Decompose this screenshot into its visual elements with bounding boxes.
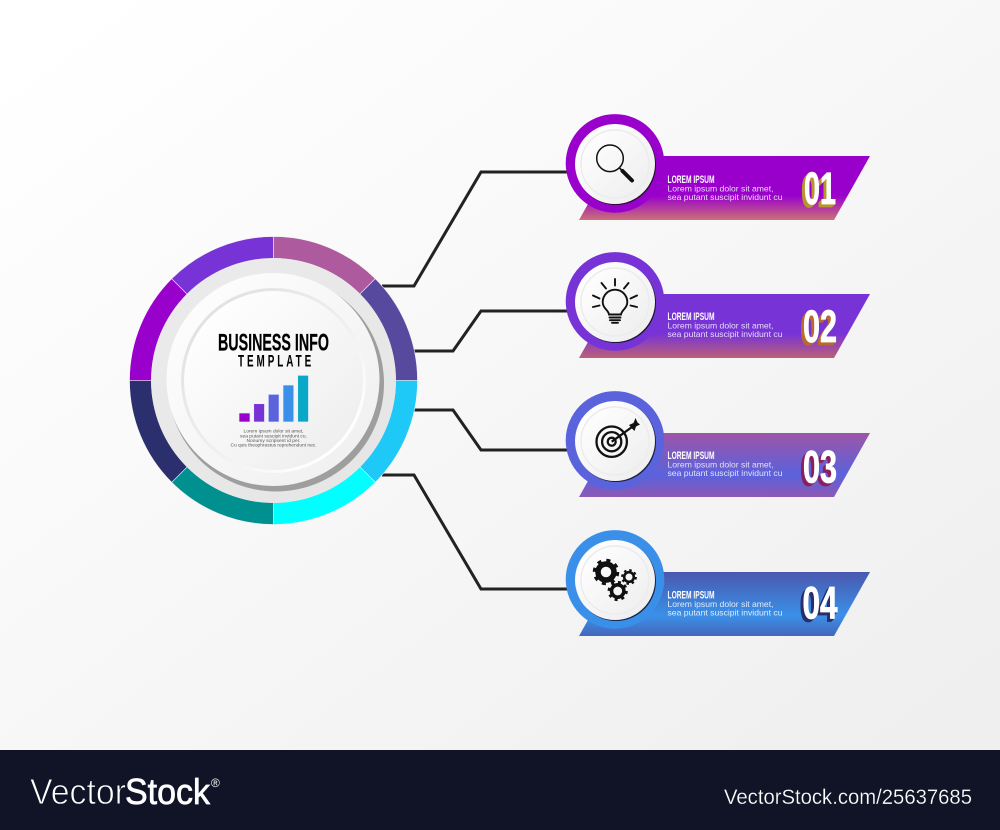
footer bar <box>0 750 1000 830</box>
footer logo: Vector <box>30 771 126 812</box>
text 02: LOREM IPSUM <box>668 311 715 323</box>
central subheading: TEMPLATE <box>238 352 311 370</box>
text 04: sea putant suscipit invidunt cu <box>668 608 783 618</box>
number 02: 02 <box>800 304 834 355</box>
item 03 <box>566 391 870 497</box>
text 04: LOREM IPSUM <box>668 590 715 602</box>
number 01: 01 <box>802 165 834 216</box>
central caption: Cu quis theophrastus reprehendunt nec. <box>230 442 316 448</box>
banner 03 <box>579 433 870 497</box>
text 03: Lorem ipsum dolor sit amet, <box>668 460 774 469</box>
central heading: BUSINESS INFO <box>218 330 329 356</box>
text 01 <box>668 174 783 202</box>
number 01: 01 <box>801 166 833 217</box>
central caption <box>230 429 316 448</box>
badge 04 <box>566 530 664 629</box>
number 03: 03 <box>803 442 837 492</box>
number 01 <box>801 163 836 217</box>
text 02: Lorem ipsum dolor sit amet, <box>668 321 774 330</box>
number 04: 04 <box>802 578 838 628</box>
number 01: 01 <box>804 163 836 214</box>
text 01: LOREM IPSUM <box>668 174 715 186</box>
number 02: 02 <box>803 301 837 352</box>
text 01: sea putant suscipit invidunt cu <box>668 193 783 202</box>
badge 03 <box>566 391 664 490</box>
item 04 <box>566 530 870 636</box>
banner 01 <box>579 156 870 220</box>
text 02: sea putant suscipit invidunt cu <box>668 330 783 339</box>
grey plate <box>151 258 396 503</box>
number 04: 04 <box>800 580 834 632</box>
text 01: Lorem ipsum dolor sit amet, <box>668 184 774 193</box>
number 03: 03 <box>800 444 834 496</box>
icon: gears <box>594 560 636 600</box>
bar chart <box>239 375 308 422</box>
central caption: sea putant suscipit invidunt cu. <box>240 433 307 438</box>
footer logo: Stock <box>125 771 211 812</box>
white disc <box>166 273 380 486</box>
text 03 <box>668 450 783 478</box>
badge 01 <box>566 114 664 213</box>
number 04: 04 <box>802 578 836 630</box>
number 02: 02 <box>802 302 836 353</box>
inner disc ring <box>182 290 364 472</box>
banner 04 <box>579 572 870 636</box>
item 01 <box>566 114 870 220</box>
footer logo <box>30 771 220 812</box>
number 03: 03 <box>802 442 836 494</box>
text 04 <box>668 590 783 618</box>
central circle <box>130 236 418 524</box>
number 03: 03 <box>801 444 835 494</box>
item 02 <box>566 252 870 358</box>
icon: magnifying glass <box>597 145 632 180</box>
central caption: Nonumy scripsent id per. <box>246 438 300 443</box>
badge 02 <box>566 252 664 351</box>
text 04: Lorem ipsum dolor sit amet, <box>668 600 774 609</box>
segmented colour ring <box>130 236 418 524</box>
text 02 <box>668 311 783 339</box>
icon: target with dart <box>596 418 640 457</box>
number 02: 02 <box>801 303 835 354</box>
number 04: 04 <box>800 580 836 630</box>
central caption: Lorem ipsum dolor sit amet, <box>244 429 304 434</box>
plate shadow crescent <box>168 276 384 492</box>
icon: light bulb <box>593 279 637 323</box>
number 01: 01 <box>803 164 835 215</box>
footer id: VectorStock.com/25637685 <box>724 786 972 809</box>
banner 02 <box>579 294 870 358</box>
footer logo: ® <box>211 776 220 790</box>
text 03: sea putant suscipit invidunt cu <box>668 469 783 478</box>
text 03: LOREM IPSUM <box>668 450 715 462</box>
connector lines <box>382 172 570 589</box>
